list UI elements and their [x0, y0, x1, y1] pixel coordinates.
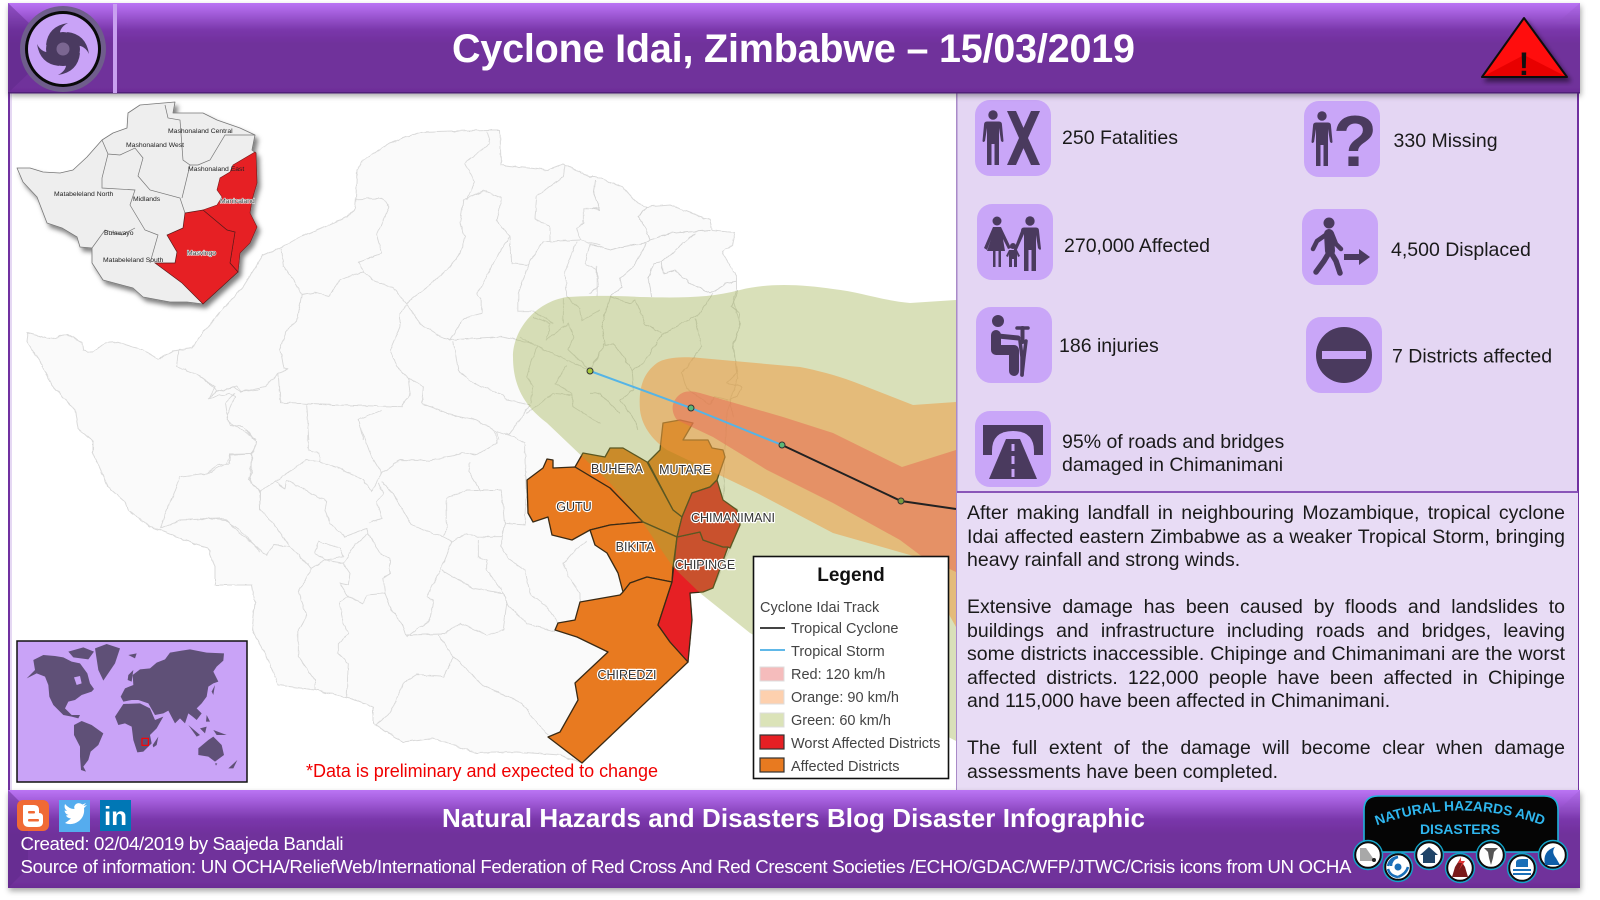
title: Cyclone Idai, Zimbabwe – 15/03/2019	[452, 27, 1135, 71]
stat: missing: ?	[1333, 102, 1377, 182]
icon: twitter	[59, 800, 90, 832]
credits: Source of information: UN OCHA/ReliefWeb/International Federation of Red Cross And Red Crescent Societies /ECHO/GDAC/WFP/JTWC/Crisis icons from UN OCHA	[20, 856, 1352, 877]
summary text block	[967, 502, 1565, 783]
logo: natural hazards and disasters: DISASTERS	[1420, 821, 1500, 837]
stat: missing: 330 Missing	[1394, 130, 1498, 152]
inset: Zimbabwe provinces map: Mashonaland Central	[168, 128, 233, 135]
stat: injuries	[976, 307, 1159, 383]
summary text block: and 115,000 have been affected in Chimanimani.	[967, 690, 1390, 712]
map legend: Cyclone Idai Track	[760, 600, 880, 616]
stat: displaced: 4,500 Displaced	[1391, 239, 1531, 261]
map legend: Green: 60 km/h	[791, 713, 891, 729]
panel: impact statistics and summary	[956, 93, 1579, 791]
map: affected districts	[527, 420, 740, 763]
map legend: Tropical Cyclone	[791, 621, 898, 637]
footer bar	[6, 790, 1584, 894]
summary text block: buildings and infrastructure including roads and bridges, leaving	[967, 620, 1565, 642]
map: wind swaths	[513, 285, 956, 741]
stat: districts affected	[1306, 317, 1552, 393]
summary text block: affected districts. 122,000 people have been affected in Chipinge	[967, 667, 1565, 689]
icon: warning triangle	[1482, 18, 1567, 82]
summary text block: Idai affected eastern Zimbabwe as a weaker Tropical Storm, bringing	[967, 526, 1565, 548]
summary text block: some districts inaccessible. Chipinge and Chimanimani are the worst	[967, 643, 1565, 665]
summary text block: The full extent of the damage will become clear when damage	[967, 737, 1565, 759]
inset: Zimbabwe provinces map: Mashonaland West	[126, 142, 184, 149]
inset: Zimbabwe provinces map: Midlands	[133, 196, 161, 203]
map legend: Red: 120 km/h	[791, 667, 885, 683]
map: district labels	[556, 462, 775, 682]
inset: world locator map	[17, 641, 247, 782]
stat: fatalities	[975, 100, 1178, 176]
stat: roads and bridges	[975, 411, 1284, 487]
credits	[20, 833, 1352, 877]
summary text block: heavy rainfall and strong winds.	[967, 549, 1240, 571]
stat: roads and bridges: 95% of roads and bridges	[1062, 431, 1284, 453]
map legend: Orange: 90 km/h	[791, 690, 899, 706]
map legend: Affected Districts	[791, 759, 900, 775]
map: cyclone track	[587, 368, 956, 509]
icon: blogger	[17, 800, 49, 831]
icon: warning triangle: !	[1519, 46, 1529, 82]
map: district labels: BUHERA	[591, 462, 644, 476]
inset: Zimbabwe provinces map	[17, 102, 257, 304]
map: district labels: CHIPINGE	[675, 558, 735, 572]
main map panel	[8, 93, 956, 791]
stat: roads and bridges: damaged in Chimanimani	[1062, 454, 1283, 476]
map: district labels: GUTU	[556, 500, 592, 514]
inset: Zimbabwe provinces map: Bulawayo	[104, 230, 134, 237]
stat: displaced	[1302, 209, 1531, 285]
icon: linkedin: in	[104, 801, 127, 831]
inset: Zimbabwe provinces map: Matabeleland South	[103, 257, 164, 264]
logo hazard icons	[1360, 847, 1560, 877]
stat: injuries: 186 injuries	[1059, 335, 1159, 357]
map: Zimbabwe districts base	[27, 130, 742, 763]
inset: Zimbabwe provinces map: Matabeleland North	[54, 191, 114, 198]
map: district labels: CHIREDZI	[597, 668, 657, 682]
stat: fatalities: 250 Fatalities	[1062, 127, 1178, 149]
stat: missing	[1304, 101, 1498, 182]
map legend: Worst Affected Districts	[791, 736, 940, 752]
icon: cyclone symbol	[20, 6, 106, 92]
credits: Created: 02/04/2019 by Saajeda Bandali	[20, 833, 344, 854]
stat: affected: 270,000 Affected	[1064, 235, 1210, 257]
logo: natural hazards and disasters: NATURAL HAZARDS AND	[1374, 801, 1544, 826]
stat: districts affected: 7 Districts affected	[1392, 346, 1552, 368]
inset: Zimbabwe provinces map: Manicaland	[220, 198, 255, 205]
summary text block: After making landfall in neighbouring Mozambique, tropical cyclone	[967, 502, 1565, 524]
summary text block: assessments have been completed.	[967, 761, 1278, 783]
stat: affected	[977, 204, 1210, 280]
preliminary data note: *Data is preliminary and expected to change	[306, 761, 658, 781]
inset: Zimbabwe provinces map: Masvingo	[187, 250, 216, 257]
map legend	[754, 556, 948, 778]
map: district labels: MUTARE	[659, 463, 711, 477]
map legend: Tropical Storm	[791, 644, 885, 660]
inset: Zimbabwe provinces map: Mashonaland East	[188, 166, 244, 173]
logo: natural hazards and disasters	[1352, 795, 1568, 884]
summary text block: Extensive damage has been caused by floods and landslides to	[967, 596, 1565, 618]
footer heading: Natural Hazards and Disasters Blog Disaster Infographic	[442, 803, 1145, 833]
header bar	[8, 3, 1580, 94]
map legend: Legend	[817, 565, 885, 586]
map: district labels: BIKITA	[616, 540, 655, 554]
map: district labels: CHIMANIMANI	[691, 511, 775, 525]
